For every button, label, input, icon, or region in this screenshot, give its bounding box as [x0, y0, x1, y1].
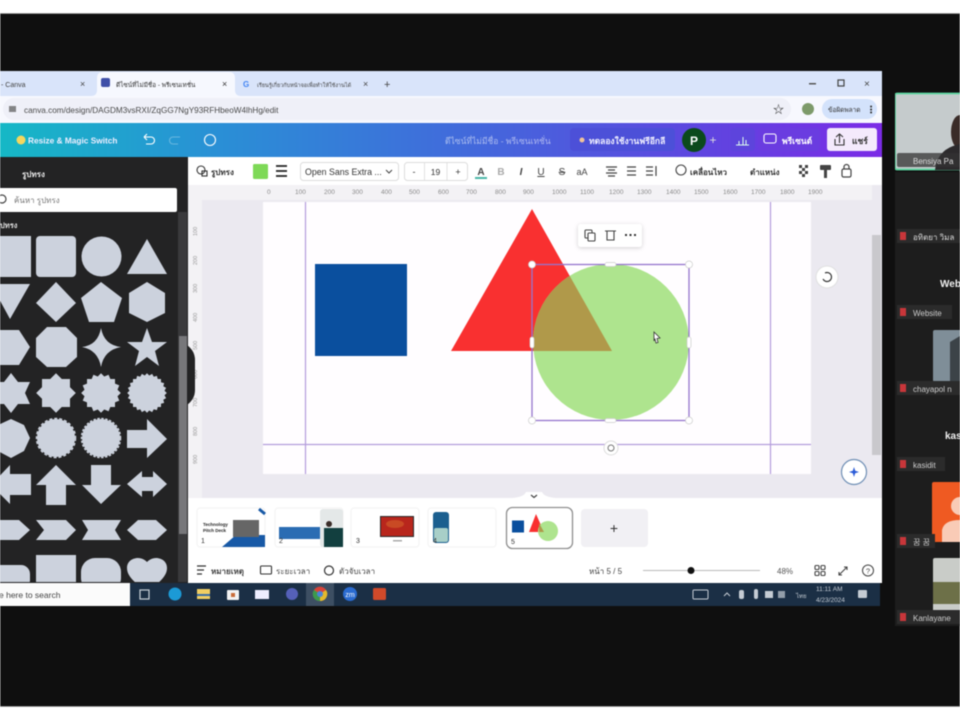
file explorer icon — [197, 589, 210, 599]
left ruler: 700 — [193, 398, 199, 407]
try pro button: ทดลองใช้งานฟรีอีกลี — [589, 136, 665, 146]
workspace — [188, 185, 882, 498]
share button: แชร์ — [852, 136, 868, 146]
text formatting icons: U — [537, 167, 545, 178]
top ruler: 500 — [409, 189, 420, 196]
chart button — [730, 128, 755, 151]
browser tab strip: × — [80, 79, 85, 89]
avatar P — [682, 128, 717, 152]
browser tab strip: เรียนรู้เกี่ยวกับหน้าจอเพื่อทำให้ใช้งานได้ — [257, 81, 352, 89]
participant avatar: orange tile — [932, 482, 960, 542]
page counter: หน้า 5 / 5 — [589, 567, 623, 576]
font selector: Open Sans Extra ... — [305, 167, 382, 177]
browser tab strip: × — [363, 79, 368, 89]
zoom icon: zm — [345, 592, 355, 599]
guide lines — [263, 202, 811, 474]
search box: e here to search — [0, 590, 61, 600]
alignment and list icons — [606, 166, 656, 176]
undo redo and cloud icons — [144, 134, 216, 146]
top ruler: 200 — [324, 189, 335, 196]
selection box — [528, 261, 692, 424]
browser tab strip: ดีไซน์ที่ไม่มีชื่อ - พรีเซนเทชั่น — [116, 80, 196, 89]
participant label: Website — [897, 305, 952, 319]
participant label: chayapol — [897, 381, 960, 395]
overlap region — [533, 276, 612, 352]
top ruler: 1000 — [552, 189, 567, 196]
fullscreen icon — [839, 567, 847, 575]
magic assistant button — [842, 460, 866, 484]
help icon: ? — [866, 566, 870, 576]
sidebar: shapes panel — [0, 157, 188, 592]
avatar P: + — [709, 133, 717, 147]
thumbnail 4: 4 — [433, 538, 437, 545]
top ruler: 400 — [381, 189, 392, 196]
left ruler: 800 — [193, 427, 199, 436]
address bar: ⋮ — [866, 105, 876, 116]
thumbnail 1: 1 — [201, 538, 205, 545]
text formatting icons: A — [477, 167, 485, 178]
participant photo: chayapol — [933, 330, 960, 382]
left ruler: 100 — [193, 227, 199, 236]
top ruler: 700 — [466, 189, 477, 196]
left ruler: 400 — [193, 313, 199, 322]
top ruler: 0 — [267, 189, 271, 196]
top ruler: 1400 — [666, 189, 681, 196]
row 4 shapes — [0, 373, 167, 413]
browser tab strip: - Canva — [1, 82, 26, 89]
duration button: ระยะเวลา — [276, 567, 310, 576]
text formatting icons: S — [559, 167, 566, 178]
text formatting icons — [475, 167, 588, 179]
presenter video tile: Bensiya Pa — [913, 157, 954, 166]
present button — [758, 128, 820, 151]
participant photo: Kanlayane — [933, 558, 960, 612]
search box: ค้นหา รูปทรง — [14, 196, 60, 206]
animate button: เคลื่อนไหว — [690, 166, 728, 177]
left ruler: 900 — [193, 455, 199, 464]
share button — [827, 128, 877, 151]
collapse tab — [512, 492, 556, 498]
bottom status row — [197, 565, 874, 577]
browser tab strip — [0, 71, 882, 96]
teams icon — [286, 588, 298, 600]
panel collapse handle — [187, 345, 195, 405]
browser tab strip: × — [222, 79, 227, 89]
font selector — [300, 162, 398, 180]
participant label: symbols — [897, 534, 935, 548]
system tray: 4/23/2024 — [816, 597, 845, 604]
mail icon — [255, 590, 269, 599]
panel title: รูปทรง — [22, 170, 45, 180]
refresh button — [816, 266, 838, 288]
task view icon — [140, 590, 149, 599]
top ruler — [188, 185, 872, 200]
presenter video tile — [895, 94, 960, 170]
left ruler: 200 — [193, 256, 199, 265]
row 7 shapes — [0, 520, 167, 540]
document title: ดีไซน์ที่ไม่มีชื่อ - พรีเซนเทชั่น — [445, 135, 551, 146]
transparency paint and lock icons — [799, 164, 851, 178]
participant gallery — [895, 94, 960, 626]
top ruler: 300 — [352, 189, 363, 196]
rotate handle — [604, 441, 618, 455]
help icon — [862, 565, 874, 576]
top ruler: 1300 — [637, 189, 652, 196]
address bar: canva.com/design/DAGDM3vsRXI/ZqGG7NgY93RFHbeoW4lhHg/edit — [24, 106, 279, 115]
font size control: + — [455, 167, 461, 177]
address bar — [0, 96, 882, 124]
thumbnail 5 selected — [506, 508, 572, 548]
present button: พรีเซนต์ — [782, 136, 813, 146]
add page button: + — [610, 520, 618, 536]
search box — [0, 583, 130, 606]
thumbnail 1: Technology — [203, 522, 228, 527]
zoom icon — [343, 587, 357, 601]
participant label: Athitaya: อทิตยา วิมล — [913, 233, 954, 242]
text formatting icons: I — [520, 167, 523, 178]
participant label: symbols: 꿈 꿈 — [913, 538, 930, 547]
row 8 shapes — [0, 554, 168, 583]
zoom percent: 48% — [777, 567, 793, 576]
top ruler: 1600 — [723, 189, 738, 196]
thumbnail 3 — [351, 508, 419, 547]
windows taskbar — [0, 583, 880, 606]
icon: magic switch — [16, 136, 26, 144]
top ruler: 1800 — [780, 189, 795, 196]
shape grid — [0, 236, 167, 592]
top ruler: 800 — [495, 189, 506, 196]
thumbnail 1 — [197, 508, 265, 547]
top ruler: 1500 — [694, 189, 709, 196]
participant label: Athitaya — [897, 229, 960, 243]
avatar P: P — [690, 134, 698, 148]
editor toolbar — [188, 157, 882, 185]
duration button — [260, 566, 310, 576]
shape label — [197, 166, 234, 178]
row 2 shapes — [0, 282, 165, 322]
cursor — [654, 332, 660, 343]
timer button: ตัวจับเวลา — [339, 567, 375, 576]
font size control — [404, 162, 468, 180]
participant label: chayapol: chayapol n — [913, 385, 952, 394]
left ruler — [188, 200, 202, 498]
system tray — [693, 586, 867, 604]
red triangle — [451, 209, 612, 351]
floating toolbar — [578, 224, 642, 247]
text formatting icons: B — [497, 167, 505, 178]
browser tab strip: G — [243, 80, 249, 89]
left ruler: 300 — [193, 284, 199, 293]
resize and magic switch label: Resize & Magic Switch — [28, 136, 117, 146]
browser tab strip: + — [384, 79, 390, 91]
top ruler: 1200 — [609, 189, 624, 196]
participant label: Website: Website — [913, 309, 942, 318]
powerpoint icon — [373, 588, 386, 600]
top ruler: 1100 — [580, 189, 594, 196]
participant label: Kanlayane: Kanlayane — [913, 614, 951, 623]
top ruler: 900 — [523, 189, 534, 196]
store icon — [227, 590, 239, 600]
address bar: ☆ — [773, 103, 784, 116]
system tray: 11:11 AM — [816, 586, 842, 593]
participant label: kasidit: kasidit — [913, 461, 936, 470]
row 1 shapes — [0, 236, 167, 277]
top ruler: 1900 — [808, 189, 823, 196]
row 6 shapes — [0, 465, 167, 505]
timer button — [324, 566, 375, 576]
shape label: รูปทรง — [211, 168, 234, 178]
add page button — [581, 509, 648, 547]
participant label: Kanlayane — [897, 610, 960, 624]
border style icon — [276, 166, 287, 176]
browser tab strip: × — [864, 79, 870, 90]
search box — [0, 188, 177, 212]
canvas page — [263, 202, 811, 474]
top ruler: 1700 — [751, 189, 766, 196]
edge icon — [168, 588, 182, 600]
system tray: ไทย — [795, 592, 806, 600]
thumbnail 3: 3 — [356, 538, 360, 545]
scrollbar — [178, 212, 187, 582]
thumbnail 5 selected: 5 — [511, 539, 515, 546]
row 3 shapes — [0, 327, 167, 367]
vertical scrollbar — [872, 235, 881, 455]
chrome icon active — [306, 583, 334, 606]
row 5 shapes — [0, 418, 167, 458]
blue square — [315, 264, 407, 356]
page thumbnail strip — [188, 492, 882, 583]
green circle — [533, 264, 689, 420]
left ruler: 500 — [193, 341, 199, 350]
try pro button — [570, 128, 675, 151]
zoom slider — [643, 567, 760, 574]
notes button: หมายเหตุ — [211, 567, 244, 577]
top ruler: 600 — [438, 189, 449, 196]
position button: ตำแหน่ง — [750, 168, 780, 177]
participant label: kasidit — [897, 457, 945, 471]
view grid icon — [815, 566, 825, 576]
text formatting icons: aA — [576, 167, 588, 177]
fill colour swatch — [253, 164, 268, 179]
font size control: 19 — [431, 167, 440, 177]
top ruler: 100 — [295, 189, 306, 196]
thumbnail 1: Pitch Deck — [203, 528, 227, 533]
thumbnail 2: 2 — [279, 538, 283, 545]
notes button — [197, 566, 244, 577]
canva header bar — [0, 123, 882, 157]
address bar: ข้อผิดพลาด — [828, 106, 861, 114]
animate button — [676, 165, 728, 177]
font size control: - — [412, 167, 416, 177]
thumbnail 2 — [275, 508, 343, 547]
left ruler: 600 — [193, 370, 199, 379]
thumbnail 4 — [428, 508, 496, 547]
